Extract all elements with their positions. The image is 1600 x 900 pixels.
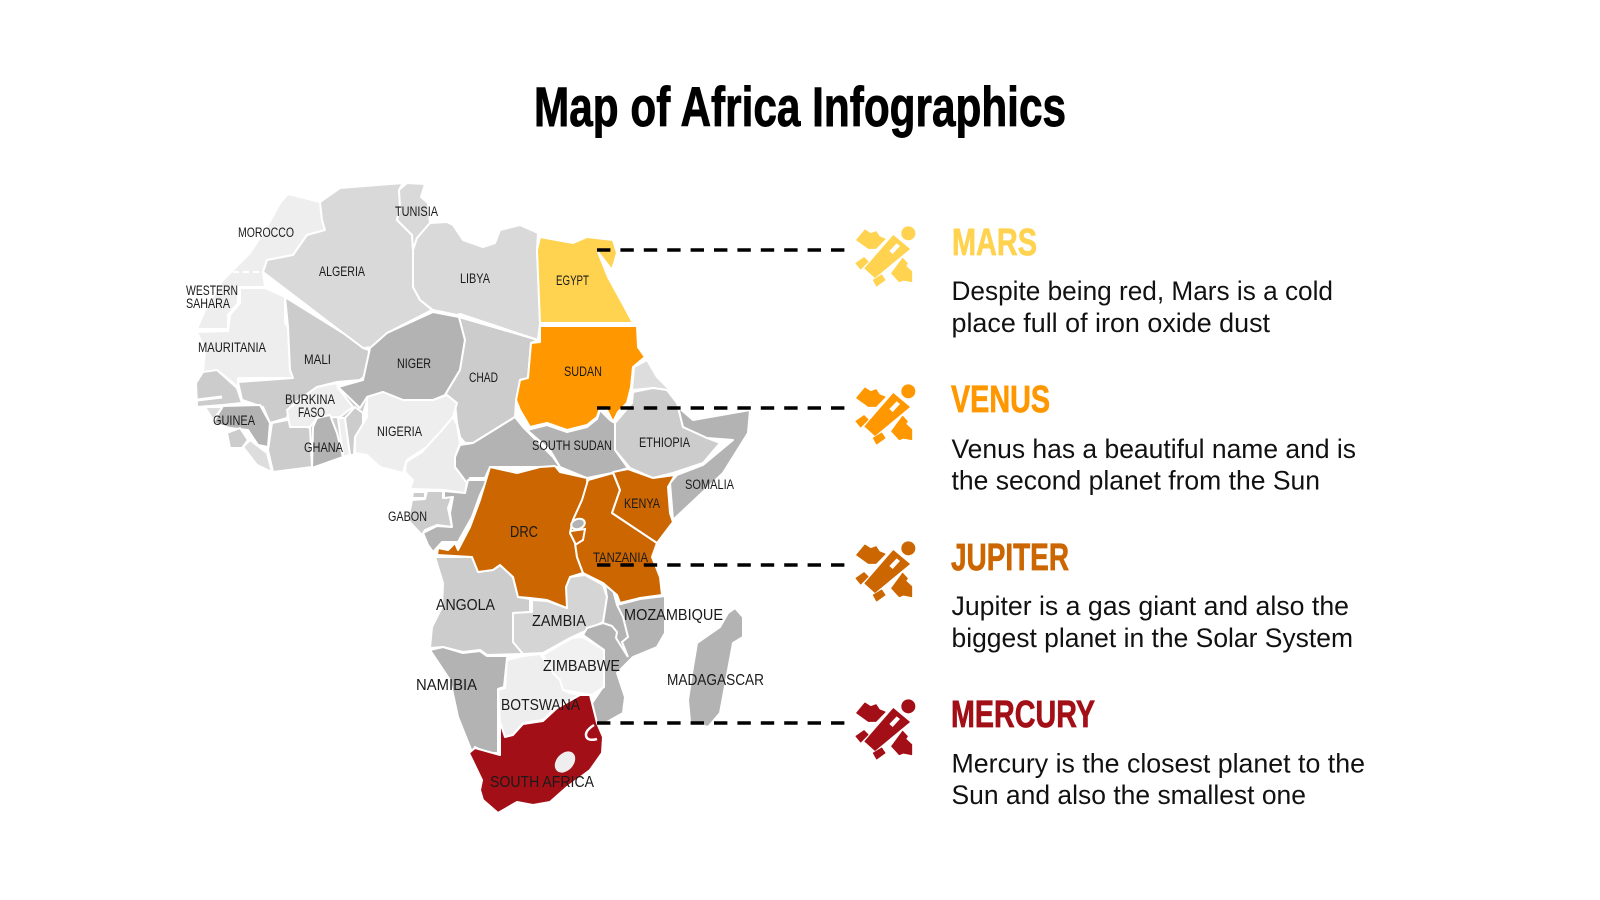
label: South Sudan: SOUTH SUDAN (532, 438, 612, 453)
label: DRC: DRC (510, 524, 538, 541)
country: Zimbabwe (543, 637, 604, 695)
country: Senegal (196, 370, 242, 407)
label: Ethiopia: ETHIOPIA (639, 435, 690, 450)
heading: Venus: VENUS (951, 379, 1050, 421)
country: Angola (430, 557, 530, 655)
text: Venus description (952, 434, 1356, 496)
country: Niger (338, 312, 465, 408)
icon: plane Venus (856, 384, 915, 444)
country: Liberia (243, 440, 272, 472)
country: Uganda and Tanzania (Jupiter) (570, 473, 662, 603)
connector: Tanzania to Jupiter (597, 563, 846, 567)
title: Map of Africa Infographics (534, 75, 1066, 138)
country: South Africa (Mercury) (469, 695, 603, 813)
Malawi border lines (603, 605, 628, 657)
country: Botswana (498, 654, 580, 737)
label: Chad: CHAD (469, 370, 498, 385)
country: Benin (345, 407, 363, 455)
country: Somalia (670, 407, 750, 520)
heading: Jupiter: JUPITER (951, 537, 1069, 579)
country: DRC (Jupiter) (437, 466, 588, 608)
text: Venus description: the second planet from the Sun (952, 466, 1320, 496)
label: South Africa: SOUTH AFRICA (490, 774, 594, 791)
label: Western: WESTERN (186, 283, 238, 298)
country: Ghana (312, 415, 343, 468)
country: Ivory Coast (268, 420, 312, 472)
country: Libya (413, 222, 540, 340)
map of Africa (196, 183, 750, 813)
label: Egypt: EGYPT (556, 273, 589, 288)
text: Mercury description: Sun and also the smallest one (952, 780, 1306, 810)
label: Namibia: NAMIBIA (416, 677, 477, 694)
icon: plane Mercury (856, 699, 915, 759)
connector: Egypt to Mars (597, 248, 846, 252)
label: Sudan: SUDAN (564, 364, 602, 379)
label: Angola: ANGOLA (436, 597, 495, 614)
label: Tanzania: TANZANIA (593, 550, 648, 565)
text: Mercury description (952, 748, 1365, 810)
label: Guinea: GUINEA (213, 413, 255, 428)
icon: plane Jupiter (856, 541, 915, 601)
label: Mauritania: MAURITANIA (198, 340, 266, 355)
text: Mars description (952, 276, 1333, 338)
label: Morocco: MOROCCO (238, 225, 294, 240)
country: Togo (338, 418, 350, 457)
label: Madagascar: MADAGASCAR (667, 672, 764, 689)
label: Mozambique: MOZAMBIQUE (624, 607, 723, 624)
text: Venus description: Venus has a beautiful name and is (952, 434, 1356, 464)
Rwanda and Burundi border (571, 529, 585, 545)
label: Somalia: SOMALIA (685, 477, 734, 492)
label: Botswana: BOTSWANA (501, 697, 580, 714)
country: Ethiopia (615, 388, 720, 478)
label: Zambia: ZAMBIA (532, 613, 586, 630)
Morocco border dashes (233, 271, 262, 273)
text: Mars description: place full of iron oxide dust (952, 308, 1271, 338)
country: Tunisia (397, 183, 430, 250)
text: Jupiter description: biggest planet in the Solar System (952, 623, 1353, 653)
connector: Sudan to Venus (597, 406, 846, 410)
label: Sahara: SAHARA (186, 296, 230, 311)
country: Nigeria (355, 392, 457, 473)
icon: plane Mars (856, 226, 915, 286)
country: Madagascar (688, 608, 743, 727)
label: Niger: NIGER (397, 356, 431, 371)
country: Sudan (Venus) (516, 326, 645, 430)
heading: Mercury: MERCURY (951, 694, 1095, 736)
country: Eswatini (586, 725, 597, 740)
country: Egypt (Mars) (537, 237, 633, 323)
label: Zimbabwe: ZIMBABWE (543, 658, 620, 675)
label: Gabon: GABON (388, 509, 427, 524)
country: Cameroon (405, 417, 467, 493)
label: Libya: LIBYA (460, 271, 490, 286)
label: Algeria: ALGERIA (319, 264, 365, 279)
label: Faso: FASO (298, 405, 325, 420)
country: Zambia (513, 575, 607, 654)
lake: Lake Victoria (570, 517, 586, 531)
country: Kenya (Jupiter) (612, 469, 675, 543)
map labels (186, 204, 764, 791)
country: Namibia (430, 647, 523, 753)
country: Guinea-Bissau (205, 407, 223, 420)
country: Sierra Leone (227, 428, 248, 448)
label: Mali: MALI (304, 352, 331, 367)
country: Guinea (213, 405, 270, 447)
country: Central African Republic (455, 417, 560, 483)
country: Mozambique and Malawi (583, 585, 665, 723)
country: Mauritania (197, 288, 293, 387)
country: Eritrea (632, 360, 683, 403)
country: Equatorial Guinea (412, 492, 425, 498)
heading: Mars: MARS (952, 222, 1037, 264)
text: Mars description: Despite being red, Mars is a cold (952, 276, 1333, 306)
Gambia (197, 397, 222, 400)
country: Gabon (408, 491, 452, 535)
label: Tunisia: TUNISIA (395, 204, 438, 219)
country: Lesotho (551, 747, 579, 777)
country: Morocco and Western Sahara (197, 194, 325, 329)
text: Mercury description: Mercury is the closest planet to the (952, 748, 1365, 778)
country: Mali (238, 297, 369, 423)
label: Nigeria: NIGERIA (377, 424, 422, 439)
country: Chad (445, 317, 538, 443)
text: Jupiter description (952, 591, 1353, 653)
country: Republic of Congo (423, 480, 487, 552)
connector: South Africa to Mercury (597, 721, 846, 725)
West Africa underlay (262, 388, 367, 472)
country: South Sudan (527, 410, 628, 478)
label: Kenya: KENYA (624, 496, 660, 511)
text: Jupiter description: Jupiter is a gas giant and also the (952, 591, 1349, 621)
label: Ghana: GHANA (304, 440, 343, 455)
country: Algeria (263, 183, 432, 348)
label: Burkina: BURKINA (285, 392, 335, 407)
country: Burkina Faso (287, 383, 353, 427)
